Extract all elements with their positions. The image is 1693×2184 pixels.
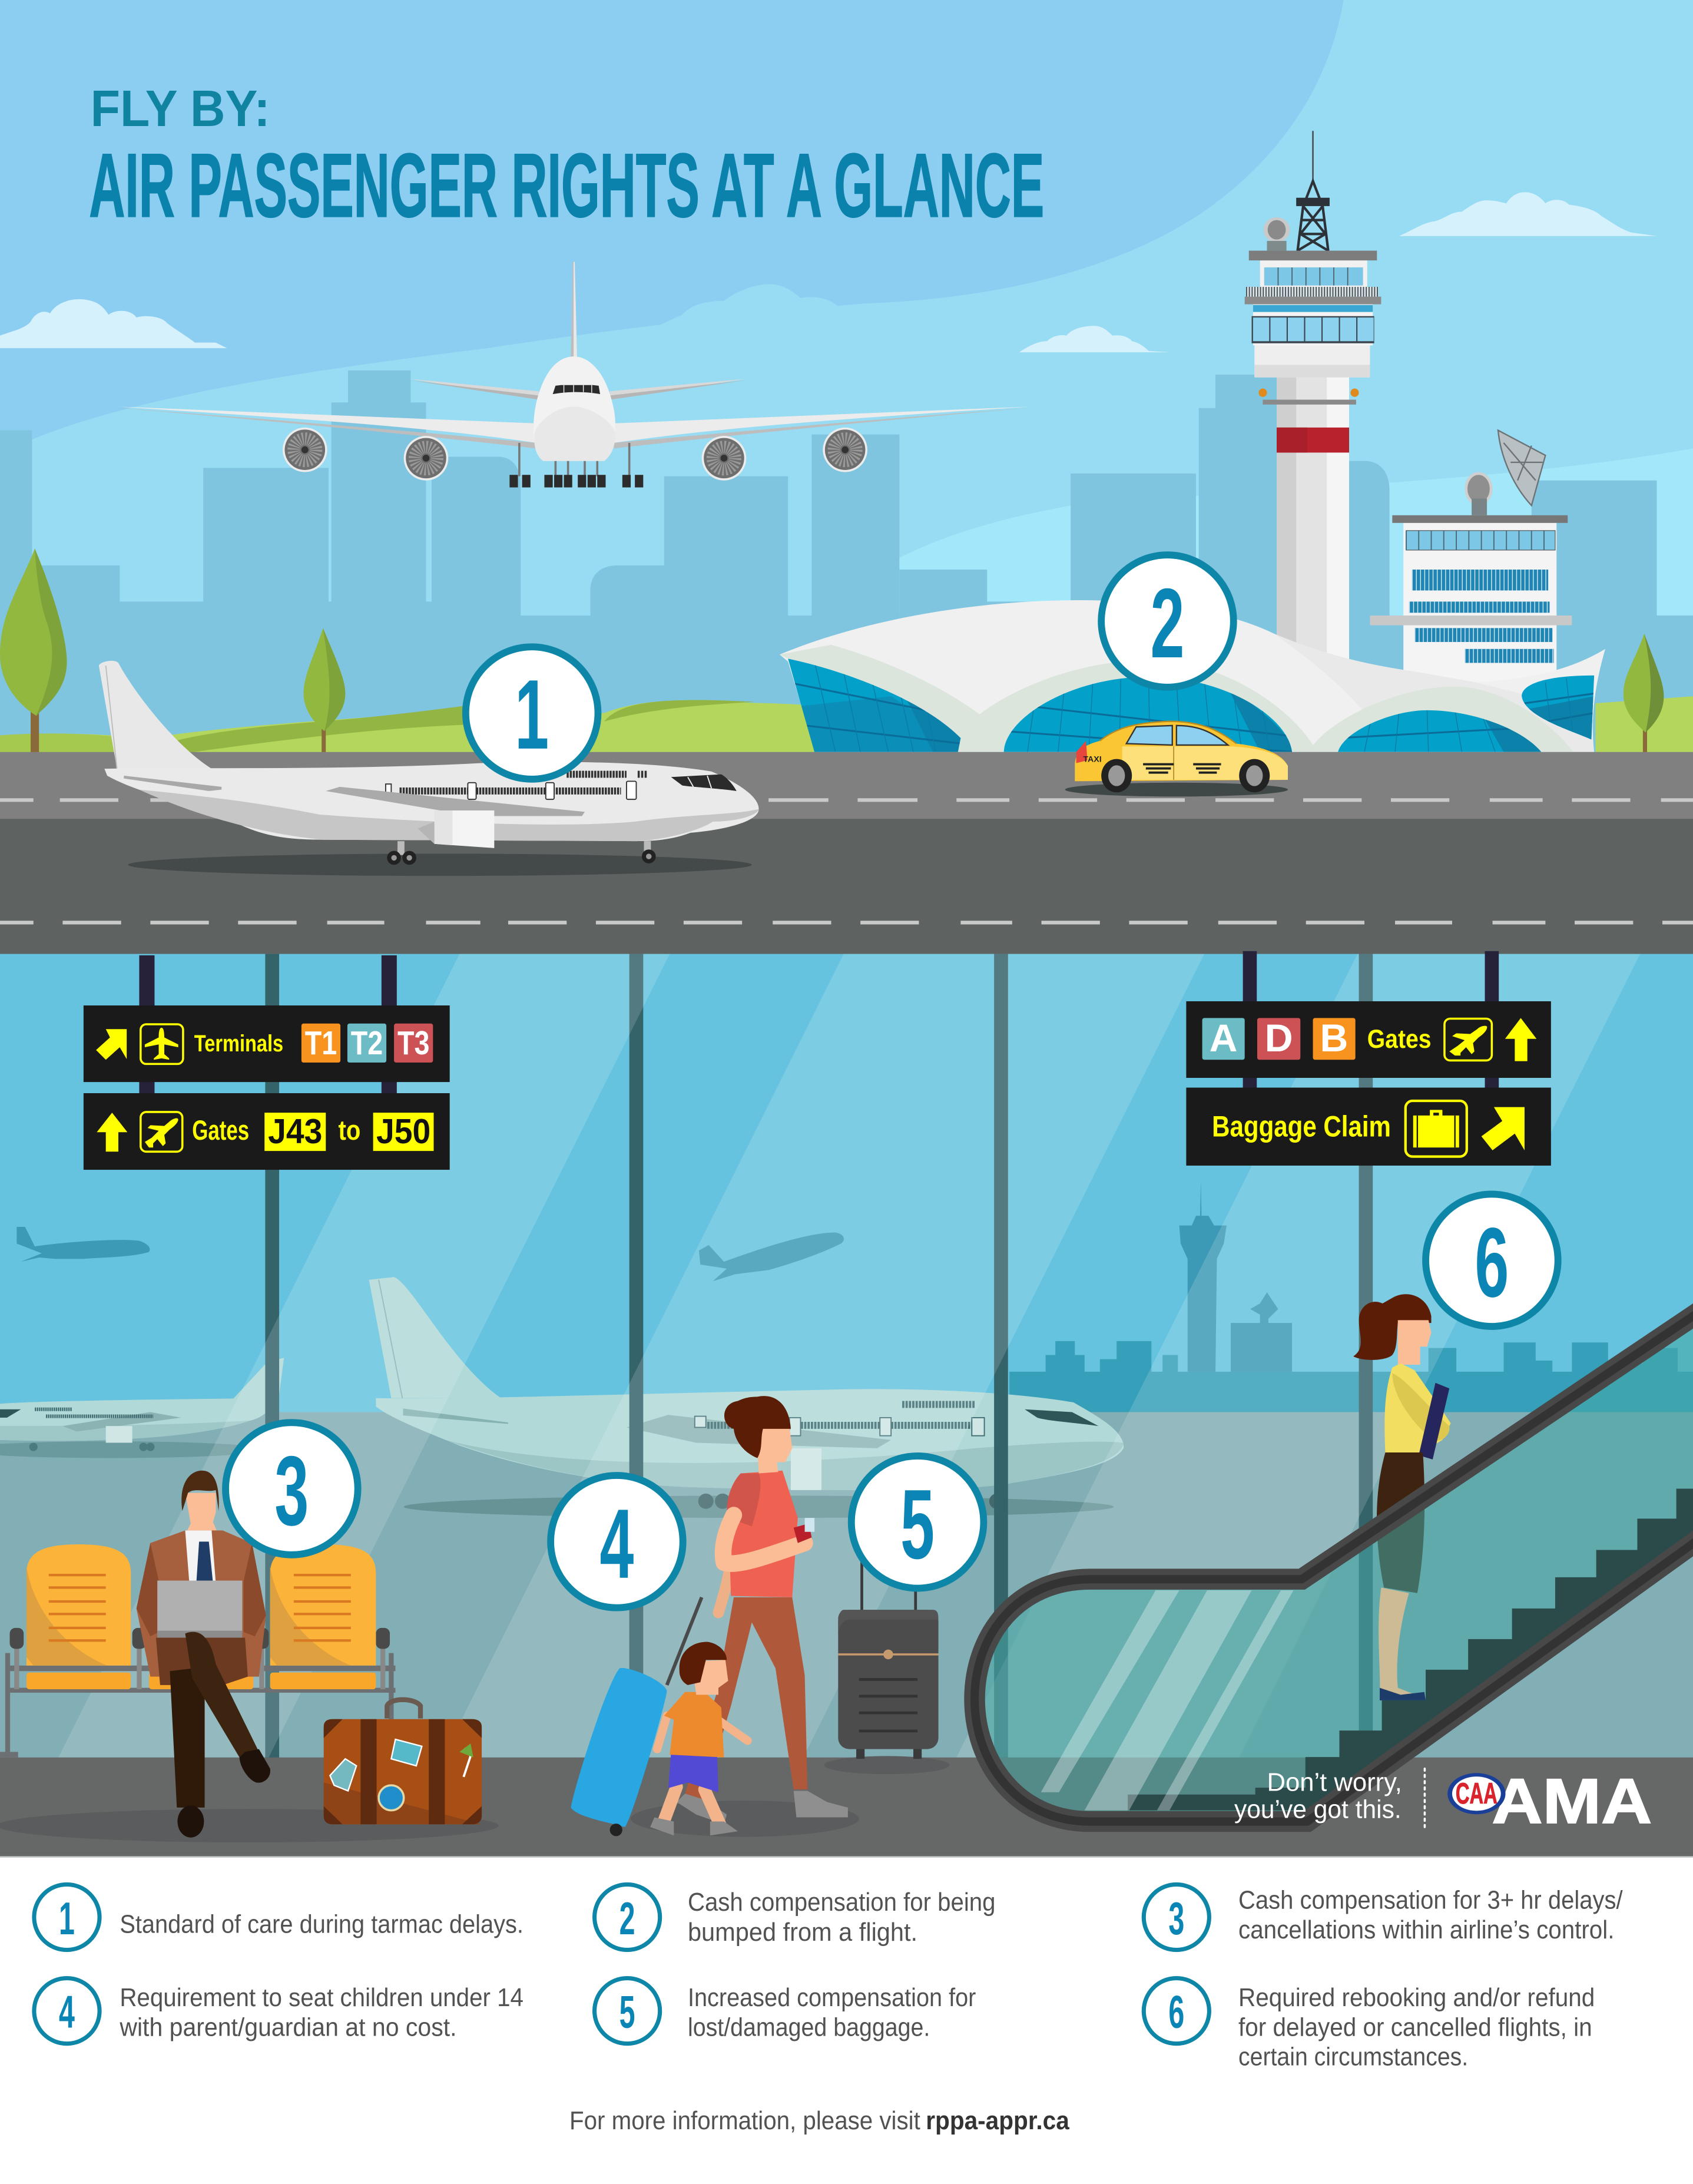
large parked plane xyxy=(369,1277,1124,1518)
legend item 6: Required rebooking and/or refund xyxy=(1238,1983,1595,2012)
tagline xyxy=(1234,1768,1402,1824)
walking woman trousers xyxy=(685,1597,807,1799)
seating row xyxy=(0,1544,395,1758)
cloud: left xyxy=(0,299,227,348)
engine xyxy=(435,810,494,848)
plane gear xyxy=(401,841,647,855)
city skyline silhouette xyxy=(1009,1341,1693,1414)
glass reflections xyxy=(58,954,1640,1758)
airplane on runway xyxy=(99,661,759,876)
legend item 6: 6 xyxy=(1168,1986,1184,2037)
cloud: middle right xyxy=(1019,326,1171,352)
cloud: upper right xyxy=(1399,192,1657,236)
child xyxy=(650,1642,748,1835)
taxi xyxy=(1065,722,1288,796)
title xyxy=(89,80,1044,236)
woman face xyxy=(1398,1320,1432,1365)
hangers left xyxy=(139,955,397,1094)
legend item 2: 2 xyxy=(619,1892,635,1944)
tree: left xyxy=(0,549,67,753)
apron xyxy=(0,1412,1693,1759)
woman hair xyxy=(1353,1294,1432,1360)
AMA wordmark: AMA xyxy=(1492,1766,1652,1836)
man shoes xyxy=(177,1805,204,1838)
walking woman shoe back xyxy=(677,1792,727,1824)
woman walking xyxy=(677,1396,848,1824)
landing gear xyxy=(519,443,630,476)
number badge 6 xyxy=(1426,1194,1558,1326)
terminal glass xyxy=(788,658,1595,752)
legend item 1 xyxy=(34,1884,524,1950)
child hair xyxy=(680,1642,727,1685)
laptop xyxy=(157,1581,242,1633)
legend item 5: 5 xyxy=(619,1986,635,2037)
CAA badge: CAA xyxy=(1456,1777,1497,1810)
number badge 1: 1 xyxy=(515,659,549,770)
gates sign right: B xyxy=(1320,1017,1348,1060)
wings xyxy=(118,406,1031,443)
man hair xyxy=(181,1471,219,1511)
panel: floor xyxy=(0,1758,1693,1858)
tower dish xyxy=(1264,217,1290,242)
legend item 2: Cash compensation for being xyxy=(688,1888,995,1917)
number badge 4 xyxy=(551,1475,683,1608)
escalator xyxy=(975,1311,1693,1822)
legend item 5 xyxy=(595,1978,976,2044)
child arms xyxy=(657,1716,748,1749)
luggage stickers xyxy=(391,1739,422,1766)
cloud: centre xyxy=(636,284,912,334)
brown suitcase xyxy=(324,1700,482,1824)
number badge 6: 6 xyxy=(1475,1207,1509,1318)
gates sign: J43 xyxy=(268,1111,322,1151)
number badge 1 xyxy=(466,647,598,779)
woman on escalator xyxy=(1353,1294,1451,1593)
child shirt xyxy=(664,1692,724,1758)
terminals sign: T2 xyxy=(351,1025,383,1062)
terminals sign: Terminals xyxy=(194,1030,283,1057)
floor shadow: family xyxy=(631,1801,859,1837)
seat left xyxy=(26,1544,131,1689)
legend item 3: cancellations within airline’s control. xyxy=(1238,1915,1614,1944)
walking woman arm and ticket xyxy=(723,1515,805,1564)
walking woman hair xyxy=(724,1396,791,1458)
woman skirt xyxy=(1377,1452,1424,1593)
airplane taking off xyxy=(118,262,1031,488)
legend item 3: Cash compensation for 3+ hr delays/ xyxy=(1238,1885,1623,1914)
window columns xyxy=(265,954,1373,1759)
legend item 2: bumped from a flight. xyxy=(688,1918,917,1947)
legend item 6: certain circumstances. xyxy=(1238,2042,1468,2071)
walking woman head xyxy=(756,1427,792,1473)
gates sign: to xyxy=(339,1115,360,1146)
legend item 4 xyxy=(34,1978,524,2044)
gates sign right: A xyxy=(1210,1017,1237,1060)
woman folder xyxy=(1419,1383,1449,1460)
legend item 4: 4 xyxy=(59,1986,75,2037)
stairs xyxy=(1128,1488,1693,1811)
radar building xyxy=(1370,431,1572,683)
gates sign: Gates xyxy=(192,1115,249,1146)
legend item 4: Requirement to seat children under 14 xyxy=(120,1983,524,2012)
baggage claim sign: Baggage Claim xyxy=(1212,1110,1391,1143)
radar silhouette xyxy=(1231,1292,1292,1372)
floor shadow: grey luggage xyxy=(824,1756,949,1774)
blue suitcase xyxy=(571,1597,702,1836)
terminals sign: T3 xyxy=(397,1025,429,1062)
cockpit xyxy=(553,385,600,394)
stabilizer xyxy=(124,777,221,790)
fuselage front xyxy=(534,356,615,461)
antenna lattice xyxy=(1298,181,1328,251)
walking woman back arm xyxy=(718,1560,731,1613)
panel: sky and skyline xyxy=(0,0,1693,765)
fuselage xyxy=(104,762,759,841)
legend item 1: Standard of care during tarmac delays. xyxy=(120,1910,524,1939)
tailplane xyxy=(409,379,746,400)
man neck and face xyxy=(185,1493,217,1532)
legend item 1: 1 xyxy=(59,1892,75,1944)
control tower xyxy=(1245,131,1381,676)
terminals sign: T1 xyxy=(305,1025,337,1062)
legend item 2 xyxy=(595,1884,995,1950)
child shorts xyxy=(668,1752,718,1792)
panel: legend xyxy=(0,1858,1693,2184)
number badge 5 xyxy=(852,1456,983,1589)
plane shadow xyxy=(128,853,752,876)
man with laptop xyxy=(137,1471,270,1838)
cabin windows xyxy=(400,775,627,791)
tree: right xyxy=(1624,634,1664,753)
number badge 3: 3 xyxy=(274,1436,309,1546)
panel: runway xyxy=(0,752,1693,955)
footer link line: For more information, please visit xyxy=(569,2106,920,2135)
legend item 6: for delayed or cancelled flights, in xyxy=(1238,2013,1592,2042)
baggage claim sign xyxy=(1186,1088,1551,1166)
gates sign xyxy=(84,1093,450,1170)
cab xyxy=(1254,343,1370,378)
grass hills xyxy=(0,700,814,753)
footer link line: rppa-appr.ca xyxy=(926,2106,1069,2135)
grey luggage xyxy=(838,1560,939,1759)
radar dish xyxy=(1498,431,1545,505)
cockpit window xyxy=(671,775,737,791)
seat bench xyxy=(5,1666,395,1671)
escalator reflections xyxy=(1041,1590,1293,1811)
number badge 2 xyxy=(1101,555,1234,687)
hangers right xyxy=(1243,951,1499,1090)
woman jacket xyxy=(1384,1364,1451,1454)
tower silhouette xyxy=(1180,1181,1227,1372)
legend item 3 xyxy=(1144,1884,1623,1950)
floor shadow: left xyxy=(0,1809,498,1842)
child legs xyxy=(662,1786,721,1827)
small parked plane xyxy=(0,1358,284,1458)
child shoes xyxy=(650,1817,674,1835)
tagline: Don’t worry, xyxy=(1267,1768,1402,1797)
tail fin xyxy=(99,661,211,769)
flying plane left xyxy=(16,1227,150,1262)
gates sign right: D xyxy=(1265,1017,1293,1060)
walking woman torso xyxy=(728,1471,798,1597)
legend item 6 xyxy=(1144,1978,1595,2071)
panel: terminal window view xyxy=(0,954,1693,1759)
wing xyxy=(326,787,585,816)
walking woman shoe front xyxy=(794,1791,848,1817)
sky swoosh xyxy=(0,0,1344,454)
tagline and logo xyxy=(1234,1766,1652,1836)
city buildings xyxy=(0,370,1693,765)
tagline: you’ve got this. xyxy=(1234,1795,1402,1824)
legend item 4: with parent/guardian at no cost. xyxy=(119,2013,456,2042)
seat middle xyxy=(149,1544,253,1689)
number badge 2: 2 xyxy=(1151,568,1184,679)
gates sign right xyxy=(1186,1001,1551,1078)
legend item 5: Increased compensation for xyxy=(688,1983,976,2012)
flying plane right xyxy=(699,1232,844,1281)
terminal frames xyxy=(780,645,982,752)
legend item 5: lost/damaged baggage. xyxy=(688,2013,930,2042)
number badge 3 xyxy=(226,1422,358,1555)
number badge 4: 4 xyxy=(599,1488,634,1599)
number badge 5: 5 xyxy=(900,1469,935,1580)
sign: terminals and gates J43 to J50 xyxy=(84,955,450,1170)
seat right xyxy=(270,1544,376,1689)
collar xyxy=(1263,400,1356,405)
man legs xyxy=(156,1637,248,1685)
escalator glass xyxy=(975,1316,1693,1822)
engines xyxy=(283,428,867,481)
tower stem xyxy=(1277,376,1349,676)
child face xyxy=(692,1660,728,1695)
gates sign right: Gates xyxy=(1367,1024,1432,1054)
legend item 3: 3 xyxy=(1168,1892,1184,1944)
escalator handrail xyxy=(975,1311,1693,1822)
taxi: TAXI xyxy=(1083,755,1102,764)
terminals sign xyxy=(84,1005,450,1082)
CAA badge xyxy=(1447,1773,1506,1814)
title line 1: FLY BY: xyxy=(91,80,270,137)
sign: gates and baggage claim xyxy=(1186,951,1551,1166)
gates sign: J50 xyxy=(376,1111,430,1151)
terminal building xyxy=(780,600,1615,759)
woman legs and shoe xyxy=(1379,1587,1426,1700)
man jacket xyxy=(137,1530,266,1677)
tree: middle xyxy=(303,628,345,753)
